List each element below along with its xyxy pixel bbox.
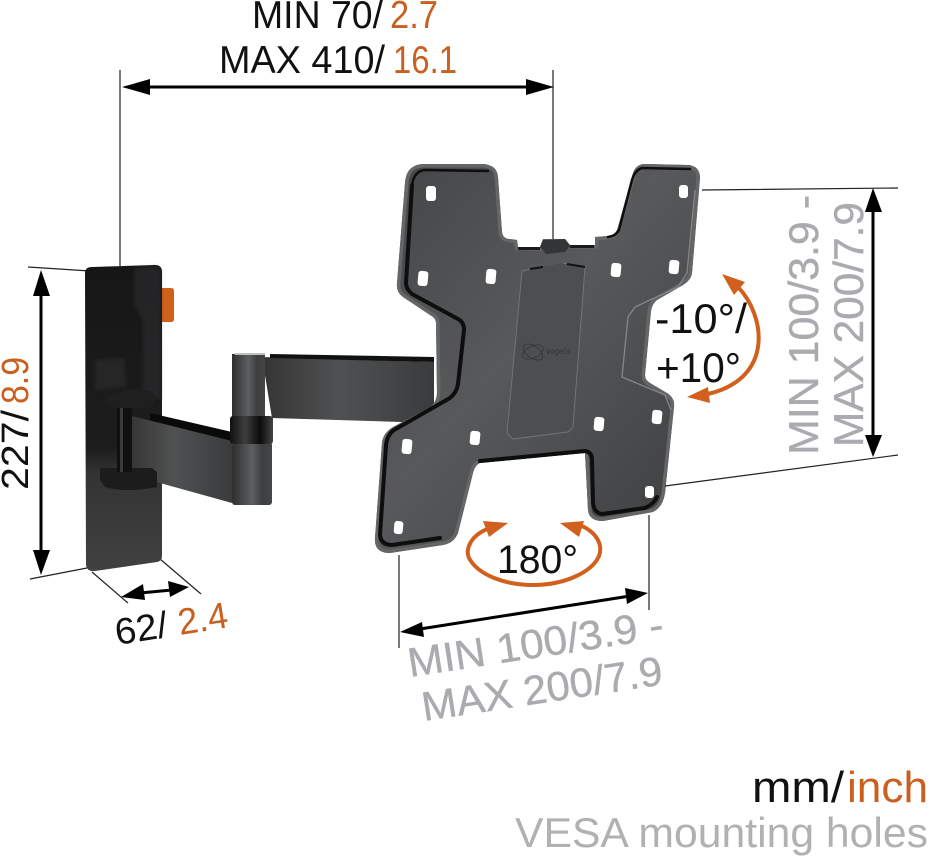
- wall mount assembly: [85, 265, 434, 571]
- logo: [520, 341, 571, 363]
- rotation label: tilt: [655, 295, 747, 391]
- VESA plate: [375, 164, 700, 553]
- lower cylinder: [232, 442, 272, 505]
- dimension text: wall plate width: 2.4: [175, 595, 231, 643]
- upper arm: [262, 357, 434, 423]
- dimension text: wall plate width: 62/: [112, 604, 171, 653]
- dimension: arm extension width arrow: [122, 79, 554, 95]
- dimension text: VESA height: [780, 195, 872, 455]
- dimension text: wall plate height: [0, 357, 37, 490]
- dimension text: arm extension: [219, 0, 457, 82]
- dimension: wall plate height: [28, 267, 90, 579]
- dimension text: VESA width: MAX 200/7.9: [418, 648, 666, 730]
- upper cylinder: [232, 354, 265, 418]
- upper arm top edge: [270, 354, 434, 362]
- dimension text: VESA width: MIN 100/3.9 -: [404, 601, 666, 686]
- wall plate: [85, 265, 162, 571]
- wall hinge bottom cap: [100, 468, 157, 490]
- mounting holes: [393, 185, 688, 534]
- dimension text: VESA height: MIN 100/3.9 -: [780, 195, 827, 455]
- rotation arc: tilt: [687, 274, 759, 403]
- wall hinge cylinder: [117, 406, 132, 472]
- rotation label: tilt: -10°/: [655, 295, 747, 342]
- dimension text: VESA width: [404, 601, 666, 730]
- light rim line: [622, 190, 695, 410]
- extension line: arm extension: [120, 70, 553, 266]
- lower arm body: [128, 415, 232, 503]
- wall plate reflection: [95, 266, 161, 400]
- dimension: wall plate width: [92, 559, 201, 603]
- centre clip: [540, 239, 570, 254]
- dimension text: wall plate width: [112, 595, 231, 653]
- rotation label: tilt: +10°: [656, 344, 741, 391]
- legend: units: mm/: [752, 763, 845, 812]
- lower arm top: [150, 413, 232, 445]
- dimension: VESA width: [399, 515, 649, 648]
- centre panel top edges: [530, 264, 585, 269]
- dimension text: arm extension: MAX 410/: [219, 39, 385, 82]
- dimension text: arm extension: 16.1: [393, 39, 457, 82]
- dimension: VESA height: [665, 188, 898, 486]
- legend: units: [752, 763, 928, 812]
- wall hinge top cap: [107, 390, 155, 408]
- logo: vogel's: [546, 347, 571, 356]
- icon: orange tab: [162, 288, 174, 322]
- joint ring: [230, 416, 273, 444]
- centre panel: [507, 263, 585, 439]
- rotation arc: swivel 180: [468, 521, 600, 585]
- legend: units: inch: [847, 763, 928, 812]
- legend: VESA mounting holes: VESA mounting holes: [515, 809, 928, 856]
- inner dark rim lines: [380, 168, 690, 545]
- rotation label: 180 degrees: 180°: [497, 538, 578, 582]
- dimension text: VESA height: MAX 200/7.9: [825, 202, 872, 447]
